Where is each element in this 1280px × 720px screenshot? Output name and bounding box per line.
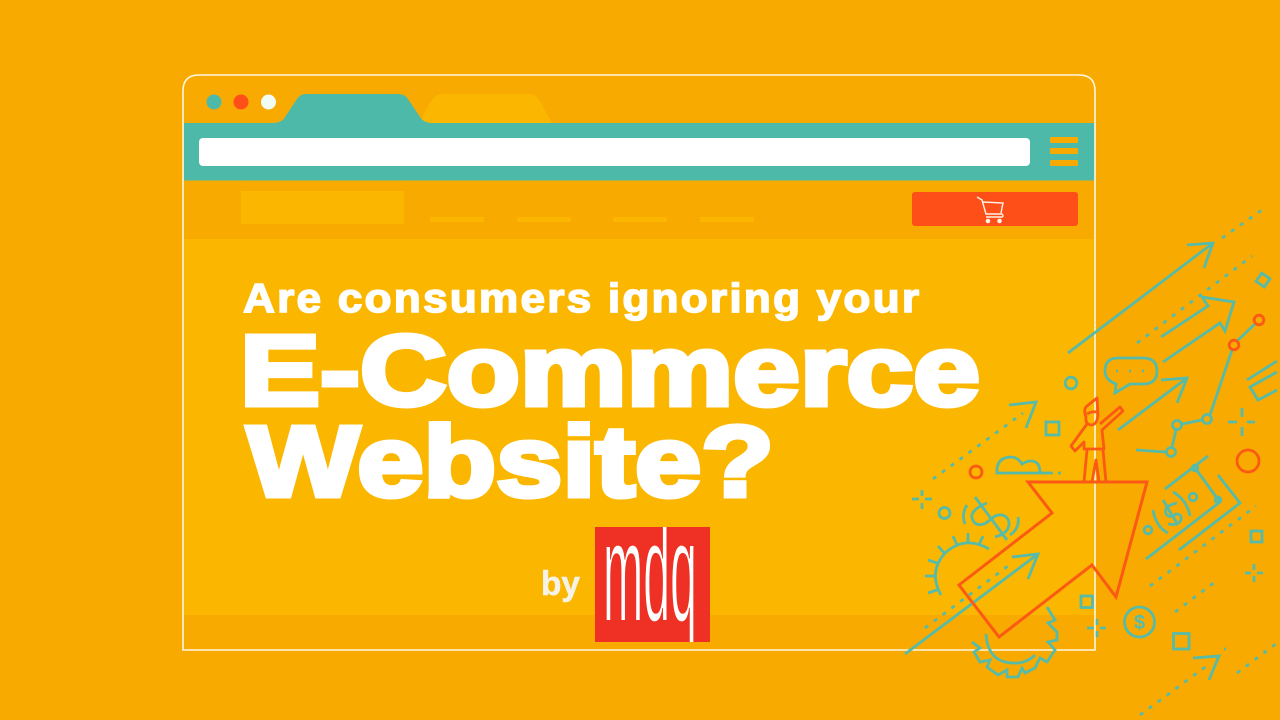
title line 1: Are consumers ignoring your — [243, 275, 919, 322]
arrow: top long — [1068, 243, 1213, 353]
dotted trail: top — [1222, 210, 1262, 238]
icon: sparkle lower right — [1245, 564, 1263, 582]
icon: window fragment — [1247, 361, 1277, 400]
arrow: lower long — [905, 554, 1038, 654]
site logo placeholder — [241, 191, 404, 224]
active tab — [272, 94, 432, 123]
mdq logo — [595, 527, 710, 642]
title — [240, 275, 980, 518]
figure standing on arrow — [1071, 398, 1123, 482]
page content area — [184, 239, 1095, 615]
dot accent — [1224, 648, 1226, 650]
inactive tab — [420, 94, 552, 123]
dotted trail: right — [1150, 506, 1256, 586]
icon: cloud — [997, 457, 1061, 473]
line chart — [1136, 315, 1264, 456]
address bar band — [184, 123, 1095, 180]
title line 2: E-Commerce — [240, 315, 980, 427]
icon: small square — [1251, 531, 1262, 542]
icon: diamond — [1256, 273, 1270, 287]
icon: square — [1046, 422, 1059, 435]
navigation placeholders — [430, 217, 754, 222]
arrow: middle — [1118, 378, 1187, 430]
dotted trail: bottom right — [1237, 643, 1277, 673]
arrow: hollow — [1161, 297, 1234, 362]
cart button — [912, 192, 1078, 226]
figure legs — [1084, 450, 1106, 482]
icon: dollar coin — [1124, 607, 1154, 637]
icon: gear — [972, 607, 1057, 677]
illustration: growth doodles — [905, 210, 1277, 715]
figure head — [1085, 398, 1098, 425]
figure body — [1071, 407, 1123, 451]
icon: shopping cart — [977, 197, 1003, 223]
icon: orange ring — [1237, 450, 1259, 472]
icon: small orange ring — [970, 466, 982, 478]
icon: sparkle center — [1087, 619, 1106, 637]
dotted trail: second — [1137, 256, 1252, 343]
browser window — [183, 75, 1095, 650]
dotted trail: lower — [925, 563, 1012, 628]
mdq logo: mdq — [603, 494, 697, 652]
byline: by — [541, 565, 580, 603]
arrow: bottom dotted — [1140, 656, 1219, 715]
icon: small ring — [939, 508, 950, 518]
icon: chat bubble — [1105, 358, 1157, 393]
icon: banknote — [1144, 456, 1240, 559]
icon: sun — [925, 533, 989, 595]
title line 3: Website? — [247, 406, 774, 518]
address input — [199, 138, 1030, 166]
arrow: dotted left — [933, 402, 1036, 479]
icon: sparkle left — [912, 490, 932, 509]
icon: hamburger menu — [1050, 137, 1078, 166]
window control dots — [206, 94, 276, 110]
icon: dollar coin: $ — [1134, 612, 1145, 634]
window outline — [183, 75, 1095, 650]
icon: large square — [1174, 634, 1189, 649]
icon: ring — [1065, 377, 1077, 389]
icon: sparkle right — [1228, 408, 1255, 436]
dotted trail: short — [1175, 582, 1215, 612]
icon: dollar with parentheses — [963, 497, 1018, 540]
big orange arrow — [959, 482, 1147, 637]
icon: square near border — [1081, 596, 1092, 608]
